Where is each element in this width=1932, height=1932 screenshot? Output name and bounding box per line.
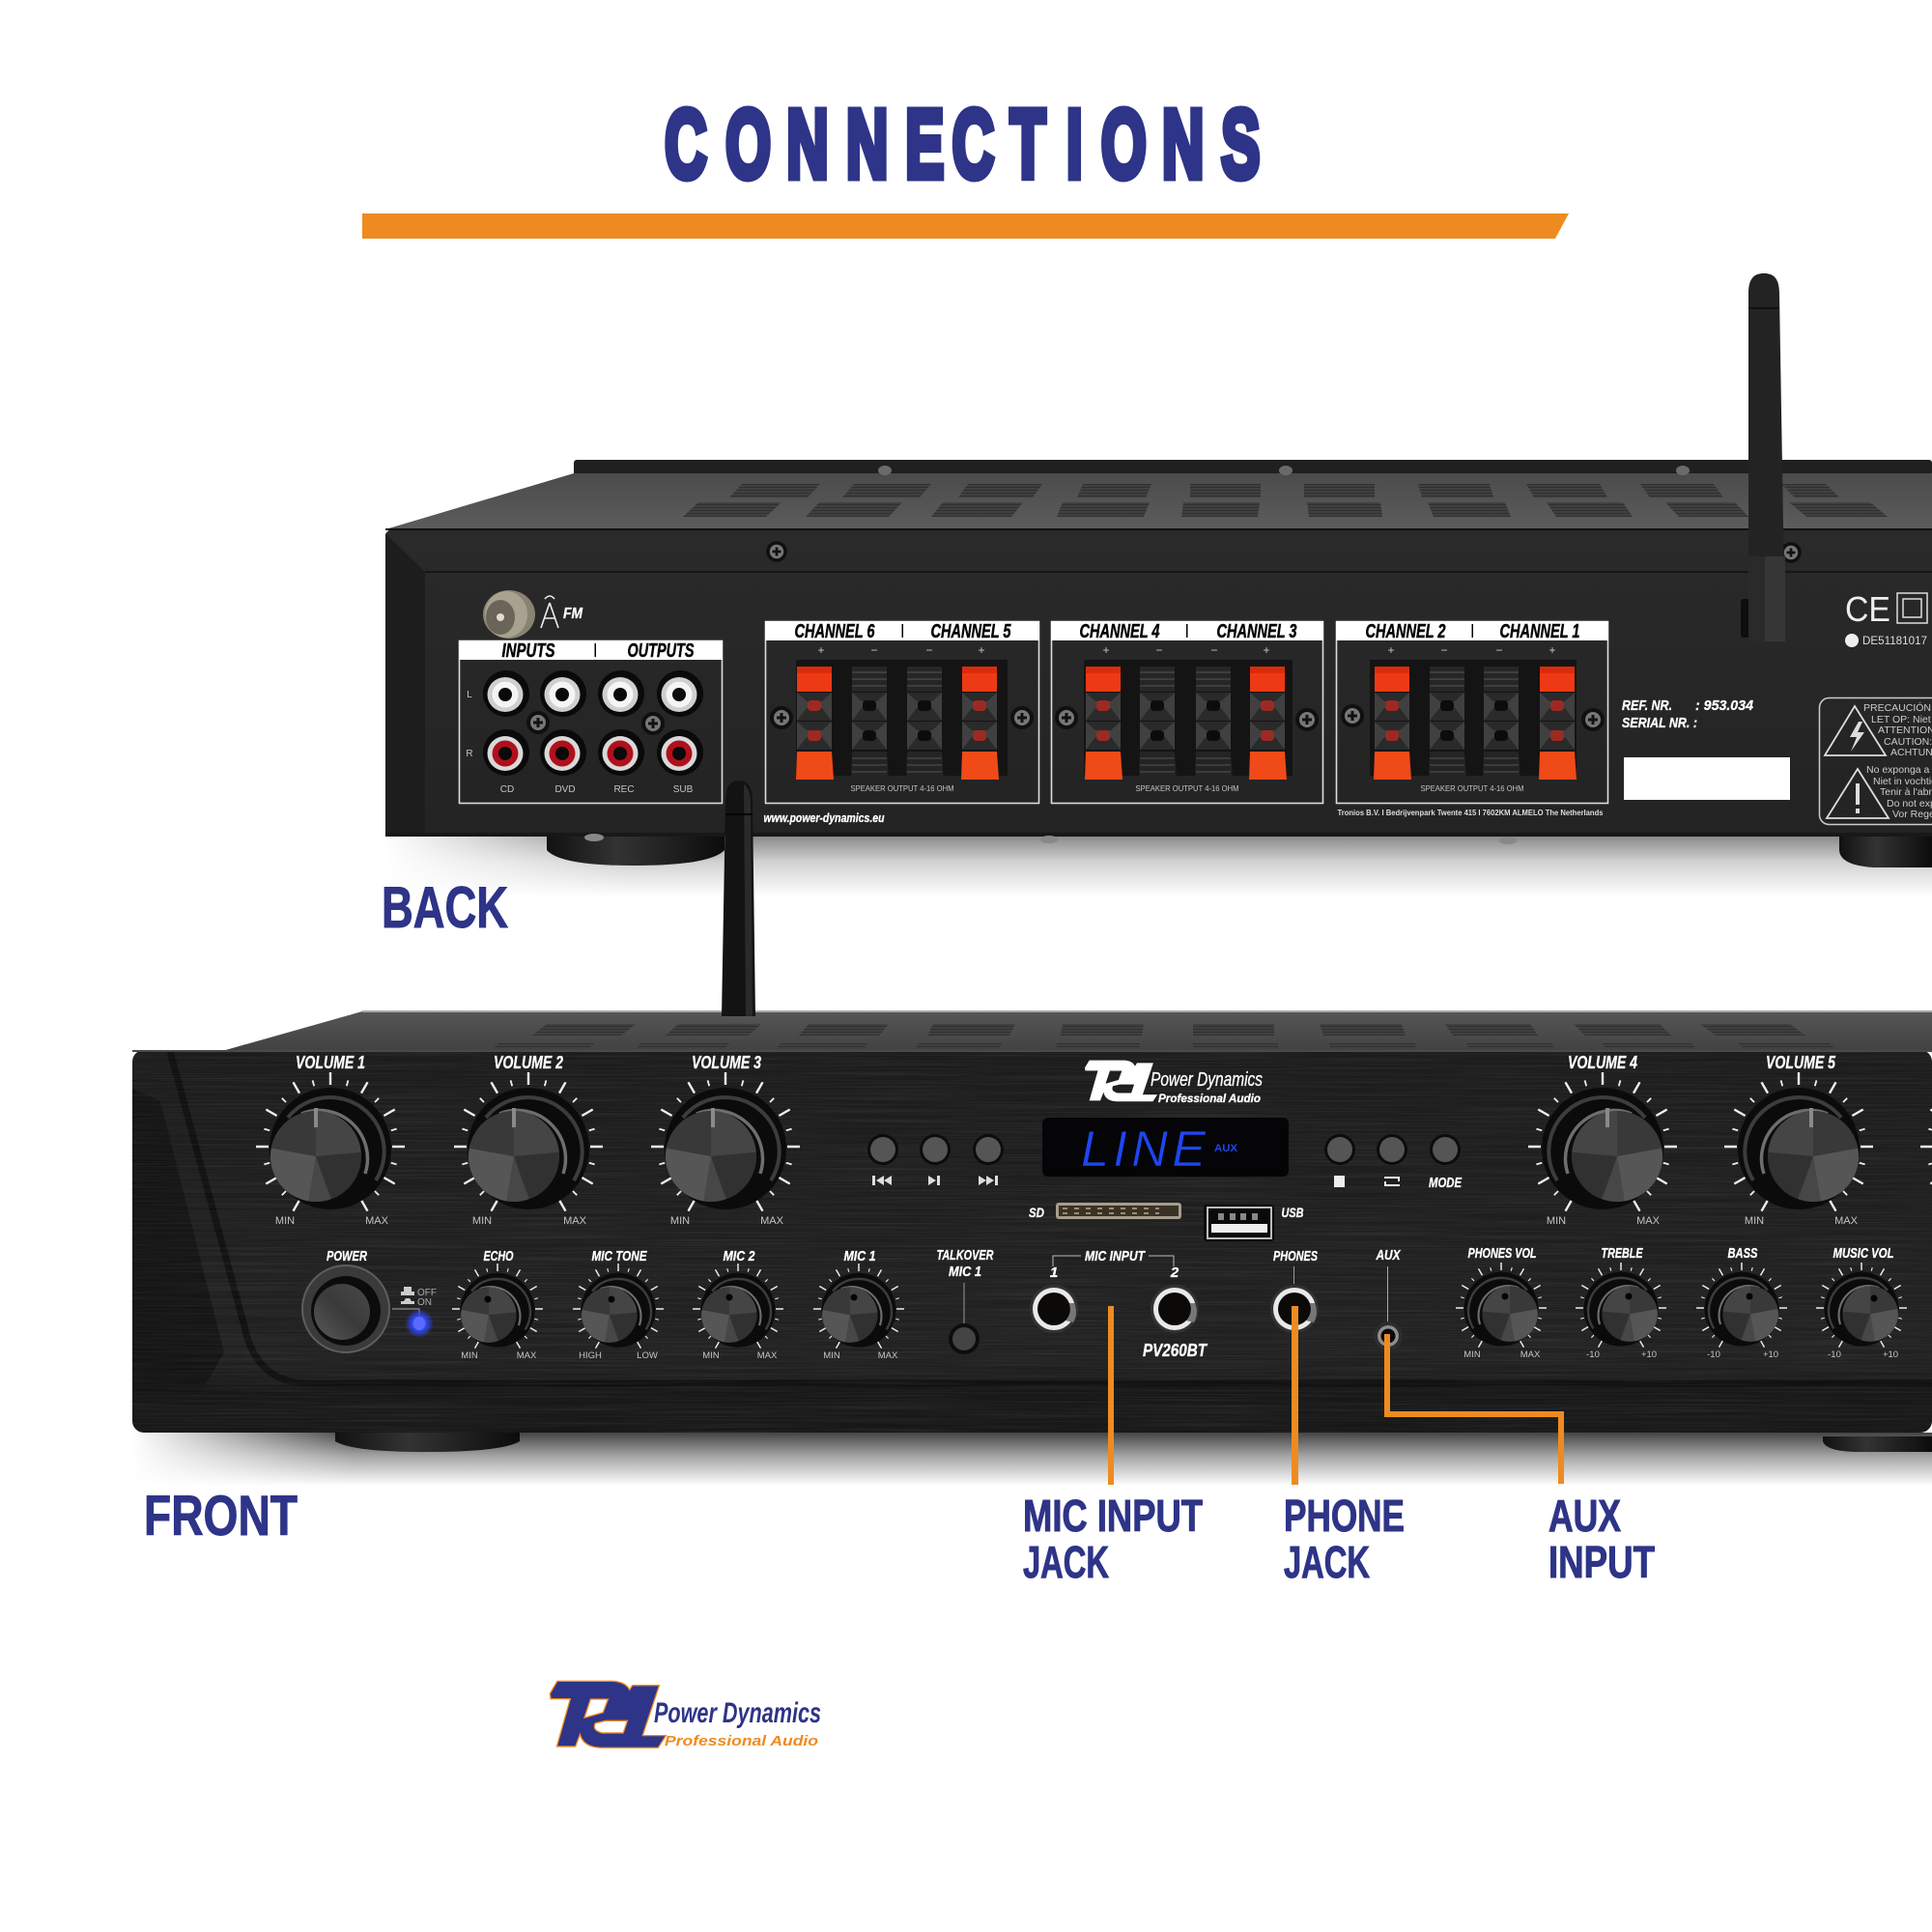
knob: volume 1: MIN bbox=[275, 1215, 295, 1227]
brand logo on the front panel bbox=[1085, 1061, 1263, 1105]
panel: channels 2 and 1: − bbox=[1495, 643, 1503, 657]
panel: inputs and outputs: L bbox=[467, 690, 472, 700]
LED display bbox=[1042, 1118, 1289, 1178]
label: phone jack: PHONE bbox=[1284, 1491, 1405, 1541]
ticks: volume 6 partly visible bbox=[1920, 1072, 1932, 1211]
back label: BACK bbox=[382, 875, 508, 940]
knob: phones volume: PHONES VOL bbox=[1468, 1245, 1536, 1262]
knob: echo: MAX bbox=[517, 1350, 537, 1361]
knob: volume 2 bbox=[454, 1053, 603, 1227]
mic input jacks: PV260BT bbox=[1143, 1341, 1208, 1360]
knob: volume 4 bbox=[1528, 1053, 1677, 1227]
panel: channels 4 and 3: − bbox=[1210, 643, 1218, 657]
screws on rear panel bbox=[766, 466, 1802, 563]
mic input jacks: MIC INPUT bbox=[1085, 1248, 1146, 1264]
aux jack bbox=[1374, 1247, 1403, 1350]
arrow: phone jack leader bbox=[1292, 1306, 1298, 1485]
knob: music volume bbox=[1816, 1245, 1907, 1360]
label: phone jack: JACK bbox=[1284, 1537, 1370, 1587]
knob: volume 4: MAX bbox=[1636, 1215, 1661, 1227]
rear antenna bbox=[1741, 273, 1785, 641]
talkover switch bbox=[937, 1247, 994, 1354]
panel: channels 6 and 5: − bbox=[870, 643, 878, 657]
knob: volume 1 bbox=[256, 1053, 405, 1227]
power status indicator bbox=[392, 1287, 437, 1338]
mic input jacks: 1 bbox=[1050, 1264, 1058, 1281]
front plate bbox=[132, 1050, 1932, 1433]
label: phone jack bbox=[1284, 1491, 1405, 1587]
panel: channels 2 and 1: SPEAKER OUTPUT 4-16 OHM bbox=[1420, 783, 1524, 793]
knob: volume 5 bbox=[1724, 1053, 1873, 1227]
knob: mic 2: MIC 2 bbox=[723, 1248, 755, 1264]
brand logo bbox=[551, 1682, 821, 1749]
panel: inputs and outputs: R bbox=[466, 749, 473, 759]
aux jack: AUX bbox=[1376, 1247, 1401, 1264]
feet bbox=[547, 834, 1932, 867]
knob: volume 5: MIN bbox=[1745, 1215, 1764, 1227]
transport buttons right bbox=[1324, 1134, 1463, 1191]
label: mic input jack: JACK bbox=[1023, 1537, 1109, 1587]
knob: echo: ECHO bbox=[483, 1248, 514, 1264]
panel: inputs and outputs: INPUTS bbox=[502, 640, 555, 662]
website: www.power-dynamics.eu bbox=[763, 810, 885, 825]
panel: channels 6 and 5: − bbox=[925, 643, 933, 657]
knob: mic tone: MIC TONE bbox=[591, 1248, 647, 1264]
brand logo on the front panel: Professional Audio bbox=[1158, 1092, 1261, 1105]
label: aux input: AUX bbox=[1548, 1491, 1621, 1541]
panel: channels 2 and 1: + bbox=[1548, 643, 1556, 657]
power button: POWER bbox=[327, 1248, 367, 1264]
certification marks: CE bbox=[1845, 589, 1890, 629]
knob: volume 1: VOLUME 1 bbox=[296, 1053, 365, 1072]
knob: treble: TREBLE bbox=[1602, 1245, 1643, 1262]
talkover switch: MIC 1 bbox=[949, 1264, 981, 1280]
knob: mic tone: HIGH bbox=[579, 1350, 602, 1361]
reference and serial number: : 953.034 bbox=[1695, 697, 1754, 714]
small knobs left bbox=[452, 1248, 904, 1361]
knob: volume 4: VOLUME 4 bbox=[1568, 1053, 1637, 1072]
panel: channels 6 and 5 bbox=[765, 621, 1039, 804]
certification marks bbox=[1845, 589, 1927, 647]
warning box bbox=[1820, 697, 1932, 825]
label: aux input: INPUT bbox=[1548, 1537, 1655, 1587]
power status indicator: ON bbox=[417, 1297, 432, 1308]
panel: inputs and outputs bbox=[459, 640, 723, 804]
label: mic input jack bbox=[1023, 1491, 1203, 1587]
panel: channels 2 and 1: + bbox=[1387, 643, 1395, 657]
knob: phones volume: MAX bbox=[1520, 1350, 1541, 1360]
power button bbox=[302, 1248, 389, 1352]
phones jack: PHONES bbox=[1273, 1248, 1318, 1264]
phones jack bbox=[1270, 1248, 1319, 1333]
transport buttons right: MODE bbox=[1429, 1175, 1463, 1191]
mic input jacks: 2 bbox=[1170, 1264, 1179, 1281]
label: aux input bbox=[1548, 1491, 1655, 1587]
reference and serial number: SERIAL NR. : bbox=[1622, 715, 1697, 731]
knob: volume 2: MIN bbox=[472, 1215, 492, 1227]
power status indicator: OFF bbox=[417, 1288, 437, 1298]
panel: inputs and outputs: OUTPUTS bbox=[628, 640, 695, 662]
knob: bass bbox=[1696, 1245, 1787, 1360]
panel: channels 2 and 1 bbox=[1336, 621, 1608, 804]
feet bbox=[335, 1433, 1932, 1452]
panel: inputs and outputs: SUB bbox=[673, 784, 694, 795]
panel: channels 2 and 1: − bbox=[1440, 643, 1448, 657]
panel: inputs and outputs: DVD bbox=[554, 784, 576, 795]
knob: phones volume bbox=[1456, 1245, 1547, 1360]
panel: channels 4 and 3: − bbox=[1155, 643, 1163, 657]
panel: channels 6 and 5: + bbox=[817, 643, 825, 657]
panel: channels 2 and 1: CHANNEL 1 bbox=[1499, 621, 1580, 642]
FM antenna connector bbox=[483, 590, 583, 639]
knob: echo bbox=[452, 1248, 543, 1361]
SD slot bbox=[1029, 1203, 1181, 1220]
USB port bbox=[1204, 1205, 1304, 1241]
knob: music volume: MUSIC VOL bbox=[1833, 1245, 1893, 1262]
knob: bass: -10 bbox=[1707, 1350, 1720, 1360]
certification marks: DE51181017 bbox=[1862, 634, 1927, 647]
front label: FRONT bbox=[144, 1485, 298, 1548]
knob: music volume: -10 bbox=[1828, 1350, 1841, 1360]
knob: mic 2: MIN bbox=[702, 1350, 720, 1361]
SD slot: SD bbox=[1029, 1205, 1044, 1220]
panel: channels 6 and 5: CHANNEL 6 bbox=[794, 621, 875, 642]
reference and serial number: REF. NR. bbox=[1622, 697, 1672, 714]
knob: music volume: +10 bbox=[1883, 1350, 1898, 1360]
knob: treble: +10 bbox=[1641, 1350, 1657, 1360]
knob: volume 5: VOLUME 5 bbox=[1766, 1053, 1836, 1072]
small knobs right bbox=[1456, 1245, 1907, 1360]
panel: channels 2 and 1: CHANNEL 2 bbox=[1366, 621, 1445, 642]
reference and serial number bbox=[1622, 697, 1790, 800]
panel: inputs and outputs: REC bbox=[613, 784, 635, 795]
knob: volume 2: VOLUME 2 bbox=[494, 1053, 563, 1072]
title: CONNECTIONS bbox=[665, 91, 1260, 198]
knob: volume 3: VOLUME 3 bbox=[692, 1053, 761, 1072]
back view of the amplifier bbox=[385, 273, 1932, 896]
panel: channels 4 and 3: + bbox=[1263, 643, 1270, 657]
knob: volume 3 bbox=[651, 1053, 800, 1227]
knob: volume 5: MAX bbox=[1834, 1215, 1859, 1227]
panel: channels 6 and 5: SPEAKER OUTPUT 4-16 OHM bbox=[850, 783, 954, 793]
knob: mic 2: MAX bbox=[757, 1350, 778, 1361]
transport buttons left bbox=[867, 1134, 1004, 1185]
FM antenna connector: FM bbox=[563, 606, 583, 622]
knob: volume 4: MIN bbox=[1547, 1215, 1566, 1227]
mic input jacks bbox=[1030, 1248, 1208, 1360]
knob: volume 3: MAX bbox=[760, 1215, 784, 1227]
knob: volume 3: MIN bbox=[670, 1215, 690, 1227]
panel: channels 4 and 3: + bbox=[1102, 643, 1110, 657]
panel: channels 6 and 5: CHANNEL 5 bbox=[931, 621, 1011, 642]
knob: volume 2: MAX bbox=[563, 1215, 587, 1227]
knob: bass: BASS bbox=[1727, 1245, 1758, 1262]
company address: Tronios B.V. I Bedrijvenpark Twente 415 I 7602KM ALMELO The Netherlands bbox=[1337, 808, 1604, 817]
knob: volume 1: MAX bbox=[365, 1215, 389, 1227]
front view of the amplifier bbox=[132, 781, 1932, 1486]
label: mic input jack: MIC INPUT bbox=[1023, 1491, 1203, 1541]
knob: mic tone: LOW bbox=[637, 1350, 658, 1361]
panel: channels 6 and 5: + bbox=[978, 643, 985, 657]
knob: mic 1 bbox=[813, 1248, 904, 1361]
brand logo: Professional Audio bbox=[665, 1733, 818, 1749]
brand logo on the front panel: Power Dynamics bbox=[1151, 1069, 1263, 1091]
knob: mic 1: MAX bbox=[878, 1350, 898, 1361]
knob: treble bbox=[1576, 1245, 1666, 1360]
panel: channels 4 and 3: CHANNEL 3 bbox=[1217, 621, 1296, 642]
USB port: USB bbox=[1281, 1205, 1304, 1220]
panel: channels 4 and 3: CHANNEL 4 bbox=[1080, 621, 1159, 642]
panel: channels 4 and 3: SPEAKER OUTPUT 4-16 OHM bbox=[1136, 783, 1238, 793]
arrow: mic input leader bbox=[1108, 1306, 1114, 1485]
knob: bass: +10 bbox=[1763, 1350, 1778, 1360]
arrow: aux input leader bbox=[1387, 1334, 1561, 1484]
knob: mic 2 bbox=[693, 1248, 783, 1361]
knob: mic tone bbox=[573, 1248, 664, 1361]
rear panel body bbox=[385, 529, 1932, 837]
knob: phones volume: MIN bbox=[1463, 1350, 1481, 1360]
large volume knobs bbox=[256, 1053, 1932, 1227]
panel: inputs and outputs: CD bbox=[500, 784, 514, 795]
orange title bar bbox=[362, 213, 1569, 239]
knob: mic 1: MIN bbox=[823, 1350, 840, 1361]
panel: channels 4 and 3 bbox=[1051, 621, 1323, 804]
front antenna bbox=[722, 781, 755, 1016]
LED display: AUX bbox=[1214, 1143, 1238, 1154]
knob: echo: MIN bbox=[461, 1350, 478, 1361]
knob: mic 1: MIC 1 bbox=[844, 1248, 875, 1264]
LED display: LINE bbox=[1081, 1122, 1207, 1178]
knob: treble: -10 bbox=[1586, 1350, 1600, 1360]
talkover switch: TALKOVER bbox=[937, 1247, 994, 1264]
brand logo: Power Dynamics bbox=[654, 1697, 821, 1729]
